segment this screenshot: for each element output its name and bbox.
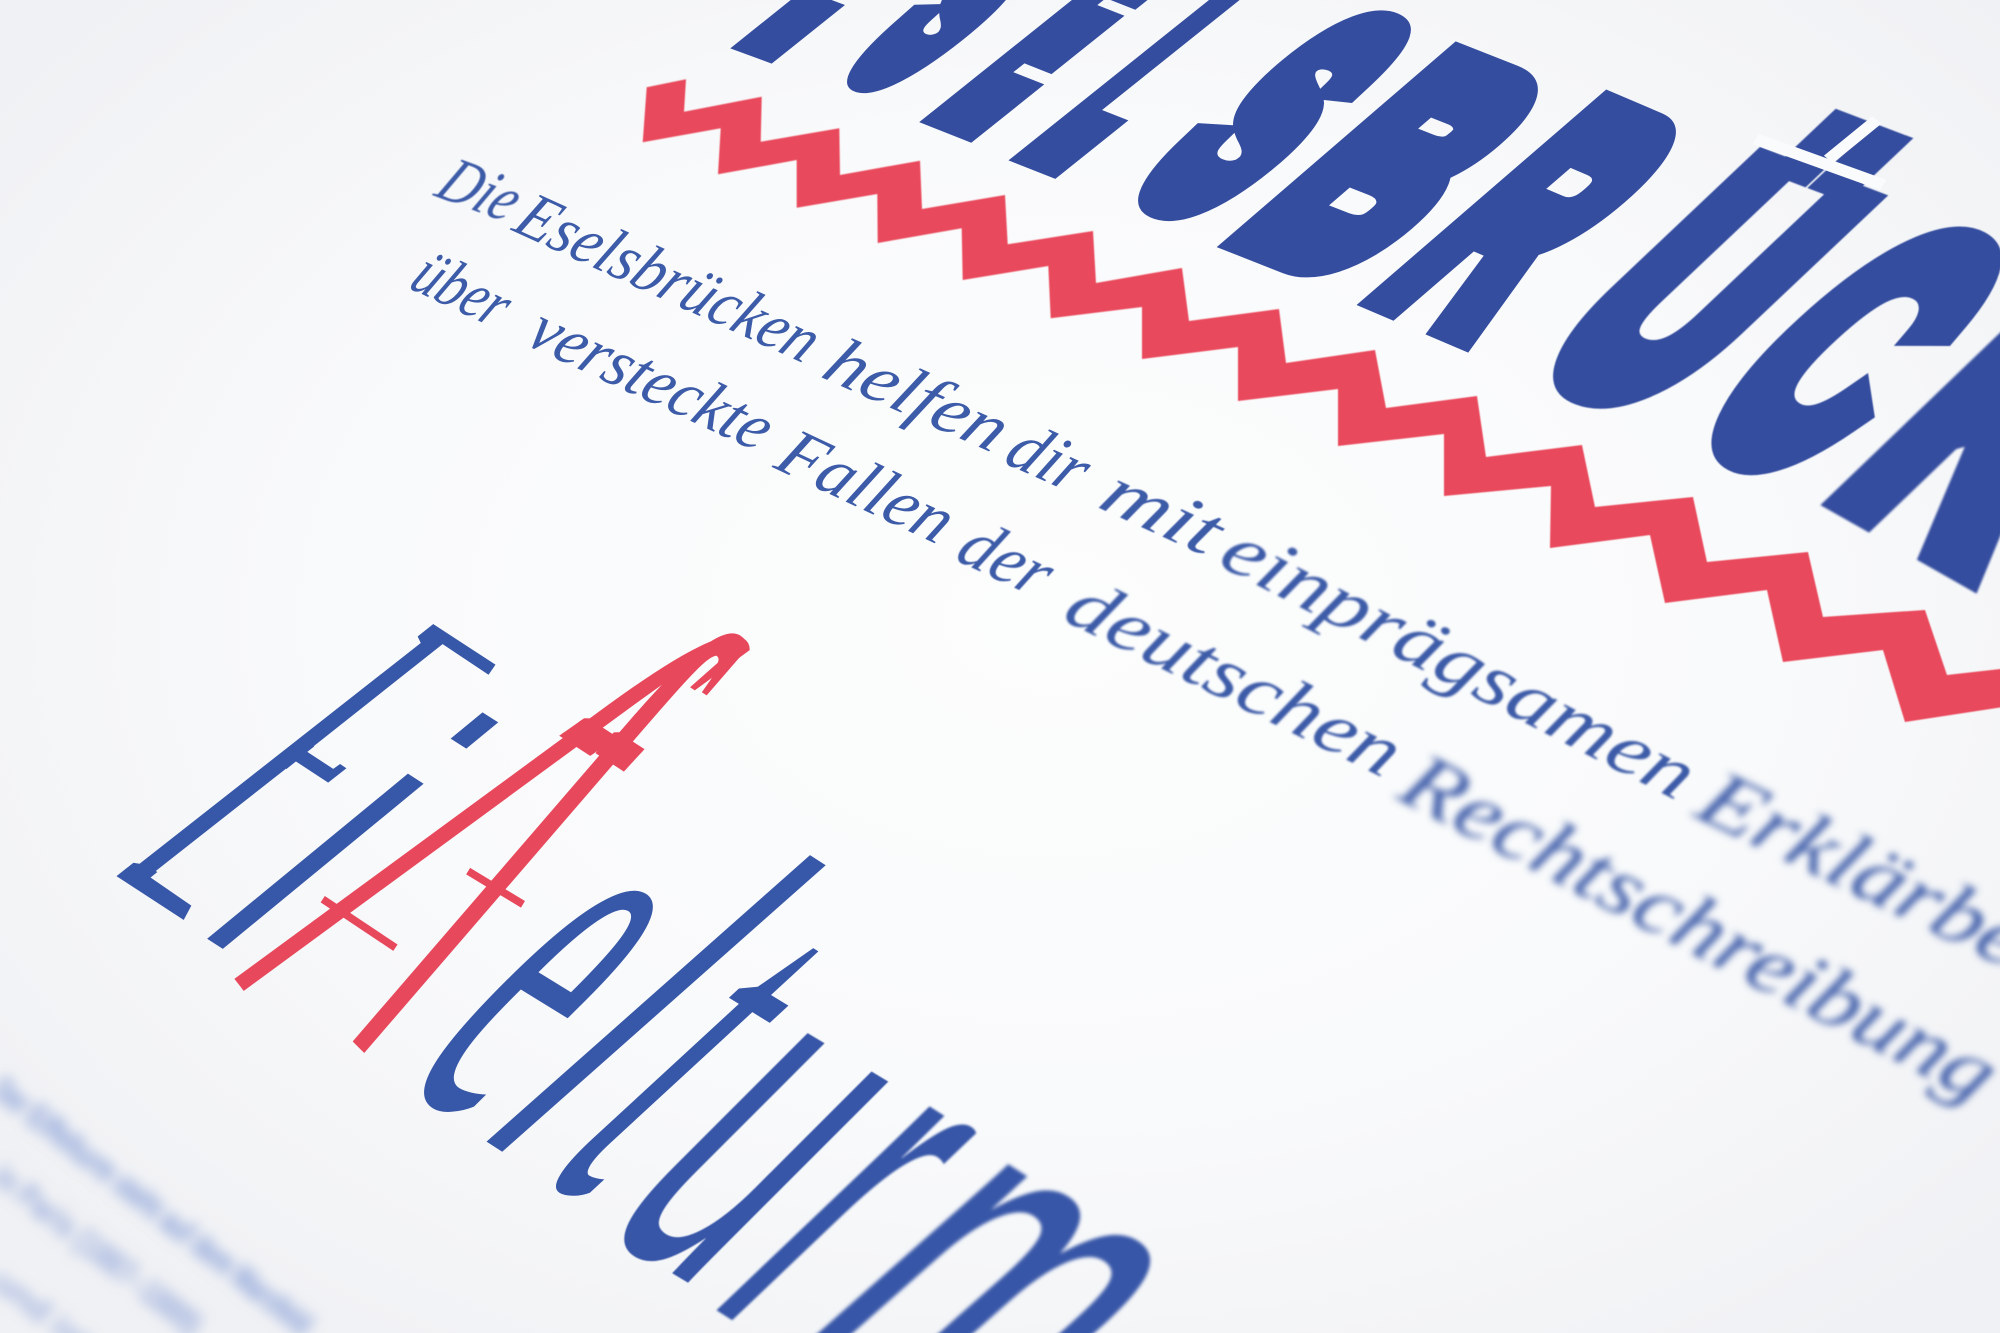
blurred body text, bottom left xyxy=(0,1071,320,1333)
subtitle text: einprägsamen xyxy=(1207,506,1714,815)
wordmark: Eiffelturm: f xyxy=(225,532,848,1025)
title: ESELSBRÜCKEN: R xyxy=(1310,48,1753,387)
wordmark: Eiffelturm: i xyxy=(114,649,578,1023)
subtitle text: deutschen xyxy=(1051,562,1419,792)
subtitle text: der xyxy=(944,506,1070,612)
subtitle text: Die xyxy=(424,143,538,234)
subtitle text: Rechtschreibung xyxy=(1383,733,2000,1118)
subtitle text: helfen xyxy=(810,324,1026,466)
wordmark: Eiffelturm: f xyxy=(348,518,819,1086)
red zigzag ribbon xyxy=(643,79,2000,722)
wordmark: Eiffelturm: t xyxy=(438,799,988,1292)
wordmark: Eiffelturm xyxy=(116,624,1153,1333)
wordmark: Eiffelturm: l xyxy=(380,776,918,1243)
subtitle text: Erklärbe xyxy=(1680,751,2000,985)
subtitle text: mit xyxy=(1087,452,1242,571)
wordmark: Eiffelturm: e xyxy=(300,684,868,1221)
subtitle text: Fallen xyxy=(762,414,971,558)
subtitle text xyxy=(399,143,2000,1118)
gaps separating umlaut dots from the U xyxy=(1753,116,1886,190)
subtitle text: Eselsbrücken xyxy=(501,178,837,376)
subtitle text: über xyxy=(399,236,528,341)
title: ESELSBRÜCKEN xyxy=(690,0,2000,861)
subtitle text: versteckte xyxy=(514,292,789,465)
title: ESELSBRÜCKEN: B xyxy=(1172,2,1618,331)
title: ESELSBRÜCKEN: Ü xyxy=(1469,101,1937,471)
subtitle text: dir xyxy=(993,409,1107,508)
wordmark: Eiffelturm: E xyxy=(0,528,627,1010)
